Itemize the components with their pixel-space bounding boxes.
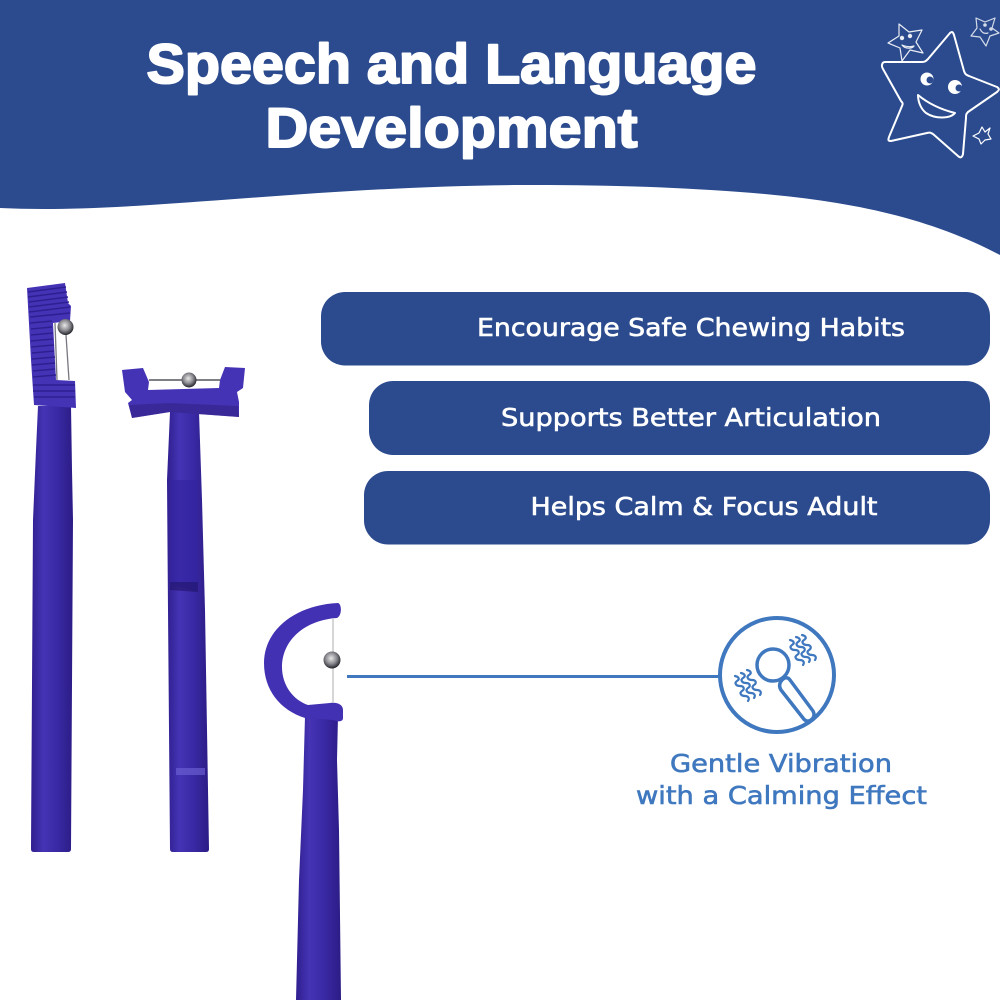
icon: small star right [971,18,999,46]
icon: smiling stars [882,18,999,157]
product: front view tool [122,367,245,852]
pill: articulation [369,381,990,455]
pill: calm and focus [364,471,990,544]
product: side C-shaped tool [264,603,343,1000]
header banner [0,0,1000,255]
icon: gentle vibration [720,618,834,732]
icon: large star [882,32,999,157]
connector line [347,675,720,678]
vibration caption [636,749,927,810]
pill: calm and focus: Helps Calm & Focus Adult [530,492,878,521]
vibration caption: with a Calming Effect [636,781,927,810]
title: Speech and Language [146,32,756,95]
benefit pills [321,292,990,544]
vibration caption: Gentle Vibration [670,749,892,778]
product: side view tool [27,283,76,852]
title [146,32,756,159]
pill: chewing habits: Encourage Safe Chewing Habits [477,313,905,342]
title: Development [266,96,638,159]
pill: articulation: Supports Better Articulation [501,403,881,432]
icon: tiny star [973,127,991,144]
icon: small star left [888,24,923,61]
pill: chewing habits [321,292,990,366]
